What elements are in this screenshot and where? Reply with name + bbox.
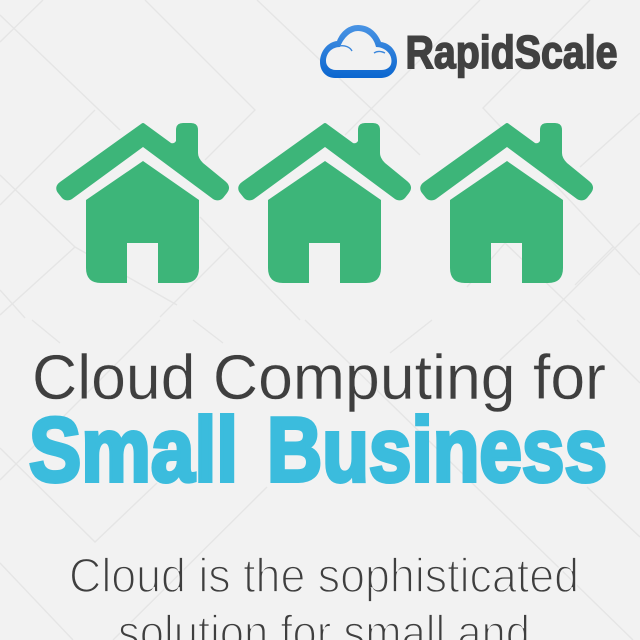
icon: three green houses [56, 123, 593, 283]
icon: house 1 [56, 123, 229, 283]
title line 2 [29, 400, 607, 501]
icon: house 3 [420, 123, 593, 283]
title line 1: Cloud Computing for [32, 343, 606, 413]
title line 2: Small [29, 400, 238, 501]
logo: RapidScale [320, 25, 618, 78]
icon: house 2 [238, 123, 411, 283]
intro text: Cloud is the sophisticated [69, 550, 579, 603]
icon: cloud [320, 25, 397, 78]
intro text [69, 550, 579, 640]
